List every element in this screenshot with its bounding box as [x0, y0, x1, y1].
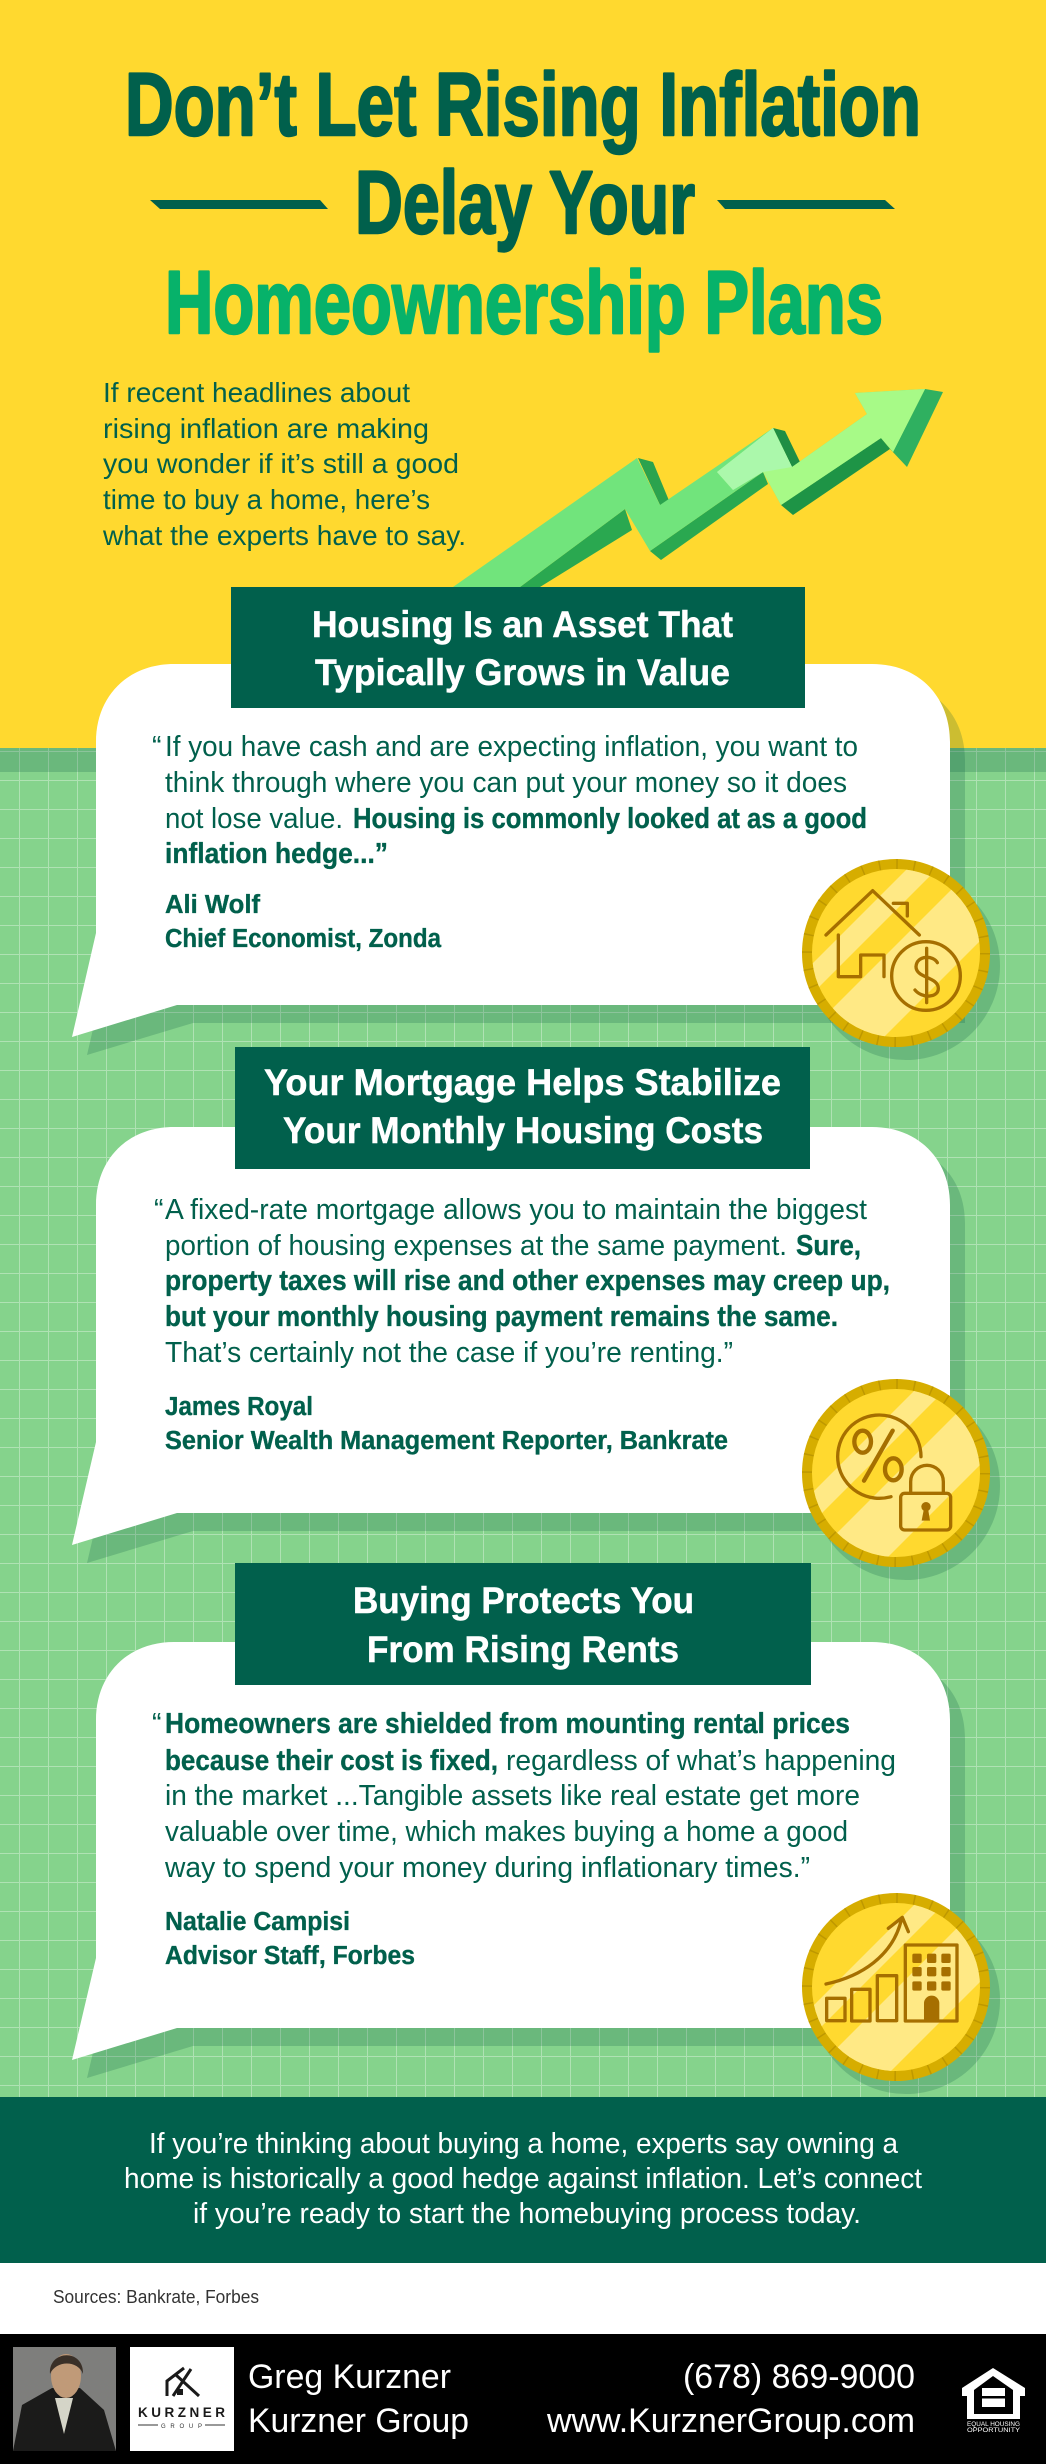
quote text: think through where you can put your money so it does [165, 767, 847, 799]
attribution: Natalie Campisi [165, 1908, 350, 1936]
attribution: James Royal [165, 1393, 313, 1421]
quote text: way to spend your money during inflationary times.” [164, 1852, 810, 1884]
panel: quote 2 [72, 1047, 1000, 1580]
icon: coin with bar chart and building [802, 1893, 1000, 2094]
heading: Housing Is an Asset That [312, 603, 733, 645]
attribution: Chief Economist, Zonda [165, 925, 442, 953]
speech bubble [72, 664, 950, 1037]
call to action band: home is historically a good hedge against inflation. Let’s connect [124, 2163, 922, 2195]
quote text: because their cost is fixed, [165, 1745, 498, 1777]
agent name: Kurzner Group [248, 2402, 469, 2440]
heading [231, 587, 805, 708]
quote text [152, 731, 867, 870]
icon: equal housing opportunity [962, 2368, 1025, 2434]
quote text: valuable over time, which makes buying a home a good [165, 1816, 848, 1848]
attribution [165, 1908, 415, 1970]
quote text: Homeowners are shielded from mounting rental prices [165, 1708, 850, 1740]
panel: quote 3 [72, 1563, 1000, 2094]
quote text: portion of housing expenses at the same payment. [165, 1230, 787, 1262]
intro text: rising inflation are making [103, 413, 429, 444]
intro text: you wonder if it’s still a good [103, 448, 459, 479]
attribution [165, 891, 442, 953]
quote text: “ [152, 731, 162, 763]
call to action band: if you’re ready to start the homebuying process today. [193, 2198, 861, 2230]
quote text: A fixed-rate mortgage allows you to maintain the biggest [165, 1194, 867, 1226]
agent photo [13, 2347, 116, 2451]
quote text: “ [152, 1708, 162, 1740]
shadow band under yellow section [0, 748, 1046, 772]
title line 2 with dashes [150, 152, 895, 252]
heading: Typically Grows in Value [315, 651, 730, 693]
intro text [102, 377, 466, 551]
quote text: If you have cash and are expecting inflation, you want to [165, 731, 858, 763]
icon: equal housing opportunity: OPPORTUNITY [967, 2427, 1021, 2434]
title line 2 with dashes: Delay Your [355, 152, 695, 252]
quote text: but your monthly housing payment remains the same. [165, 1301, 838, 1333]
background: yellow top section [0, 0, 1046, 748]
attribution: Senior Wealth Management Reporter, Bankrate [165, 1427, 728, 1455]
contact details: www.KurznerGroup.com [546, 2402, 915, 2440]
icon: coin with house and dollar [802, 859, 1000, 1060]
call to action band: If you’re thinking about buying a home, experts say owning a [149, 2128, 898, 2160]
heading: Your Monthly Housing Costs [283, 1109, 763, 1151]
bubble shadow [87, 1145, 965, 1563]
quote text: not lose value. [165, 803, 343, 835]
quote text: inflation hedge...” [165, 838, 388, 870]
heading: Buying Protects You [353, 1579, 694, 1621]
speech bubble [72, 1127, 950, 1545]
quote text: “ [154, 1194, 164, 1226]
panel: quote 1 [72, 587, 1000, 1060]
sources strip [0, 2263, 1046, 2334]
quote text: That’s certainly not the case if you’re renting.” [165, 1337, 733, 1369]
quote text [154, 1194, 890, 1369]
heading [235, 1047, 810, 1169]
icon: equal housing opportunity: EQUAL HOUSING [967, 2421, 1020, 2428]
speech bubble [72, 1642, 950, 2060]
title [125, 54, 921, 352]
bubble shadow [87, 1660, 965, 2078]
contact details: (678) 869-9000 [683, 2358, 915, 2396]
heading [235, 1563, 811, 1685]
intro text: If recent headlines about [103, 377, 410, 408]
company logo [130, 2347, 234, 2451]
icon: coin with percent and lock [802, 1379, 1000, 1580]
call to action band [0, 2097, 1046, 2263]
agent name [248, 2358, 469, 2440]
bubble shadow [87, 682, 965, 1055]
agent name: Greg Kurzner [248, 2358, 451, 2396]
quote text: property taxes will rise and other expenses may creep up, [165, 1265, 890, 1297]
intro text: time to buy a home, here’s [103, 484, 430, 515]
footer bar [0, 2334, 1046, 2464]
attribution: Ali Wolf [165, 891, 261, 919]
quote text: in the market ...Tangible assets like real estate get more [165, 1780, 860, 1812]
sources strip: Sources: Bankrate, Forbes [53, 2287, 259, 2307]
quote text: Housing is commonly looked at as a good [353, 803, 867, 835]
quote text [152, 1708, 896, 1884]
attribution: Advisor Staff, Forbes [165, 1942, 415, 1970]
contact details [546, 2358, 915, 2440]
attribution [165, 1393, 728, 1455]
quote text: Sure, [796, 1230, 861, 1262]
intro text: what the experts have to say. [102, 520, 466, 551]
company logo: GROUP [161, 2424, 202, 2430]
quote text: regardless of what’s happening [506, 1745, 896, 1777]
heading: From Rising Rents [367, 1628, 679, 1670]
background: green grid section [0, 748, 1046, 2097]
company logo: KURZNER [138, 2405, 225, 2420]
heading: Your Mortgage Helps Stabilize [264, 1061, 781, 1103]
icon: rising green arrow [453, 389, 943, 587]
